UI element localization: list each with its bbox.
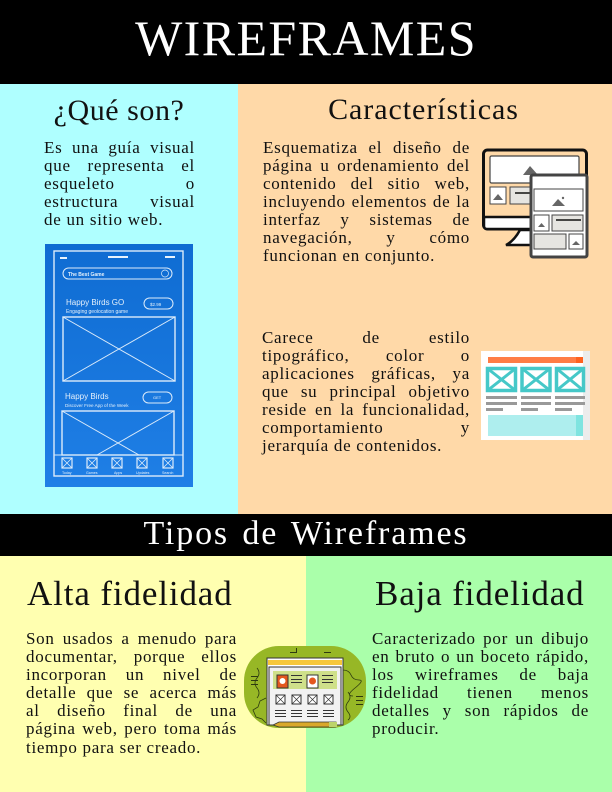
image: mobile wireframe blueprint [45,244,193,487]
text: características 2 [262,328,470,455]
panel: tipos band [0,514,612,556]
text: características 2: que su principal objetivo [262,382,470,401]
image: mobile wireframe blueprint: Games [86,471,98,475]
text: características 1: página u ordenamiento del [263,156,470,175]
panel: baja fidelidad [306,556,612,792]
text: qué son: de un sitio web. [44,210,163,229]
text: alta fidelidad: detalle que se acerca más [26,683,237,702]
text: alta fidelidad: incorporan un nivel de [26,665,237,684]
text: qué son: que representa el [44,156,195,175]
image: mobile wireframe blueprint: Happy Birds [65,392,109,401]
text: características 1 [263,138,470,265]
text: qué son: Es una guía visual [44,138,195,157]
text: alta fidelidad: página web, pero toma más [26,719,237,738]
text: alta fidelidad [26,629,237,757]
panel: características [238,84,612,514]
text: alta fidelidad: documentar, porque ellos [26,647,237,666]
text: características 1: contenido del sitio web, [263,174,470,193]
heading: baja fidelidad: Baja fidelidad [375,574,584,613]
image: mobile wireframe blueprint: Happy Birds GO [66,298,124,307]
text: características 1: incluyendo elementos de la [263,192,470,211]
text: características 2: tipográfico, color o [262,346,470,365]
icon: desktop and mobile wireframes [482,148,588,258]
image: mobile wireframe blueprint: Discover Free App of the Week [65,403,129,408]
text: alta fidelidad: tiempo para ser creado. [26,738,201,757]
image: mobile wireframe blueprint: Updates [136,471,150,475]
image: mobile wireframe blueprint: Engaging geolocation game [66,309,128,315]
panel: alta fidelidad [0,556,306,792]
text: baja fidelidad: producir. [372,719,439,738]
image: mobile wireframe blueprint: GET [153,395,162,400]
panel: qué son [0,84,238,514]
text: características 2: jerarquía de contenidos. [262,436,442,455]
text: qué son: esqueleto o [44,174,195,193]
image: mobile wireframe blueprint: Search [162,471,173,475]
heading: características: Características [328,93,519,126]
text: características 1: Esquematiza el diseño de [263,138,470,156]
text: características 1: interfaz y sistemas de [263,210,470,229]
text: características 2: Carece de estilo [262,328,470,346]
panel: title band [0,0,612,84]
icon: wireframe browser illustration [244,646,366,728]
image: mobile wireframe blueprint: The Best Game [68,272,105,278]
text: baja fidelidad: Caracterizado por un dibujo [372,629,589,648]
image: mobile wireframe blueprint: $2.99 [150,302,162,307]
heading: alta fidelidad: Alta fidelidad [27,574,233,613]
text: baja fidelidad: en bruto o un boceto rápido, [372,647,589,666]
image: mobile wireframe blueprint: Today [62,471,72,475]
text: características 1: funcionan en conjunto. [263,246,435,265]
text: qué son [44,138,195,229]
text: baja fidelidad: detalles y son rápidos de [372,701,589,720]
heading: qué son: ¿Qué son? [54,94,184,127]
text: qué son: estructura visual [44,192,195,211]
text: baja fidelidad: los wireframes de baja [372,665,589,684]
text: características 2: comportamiento y [262,418,470,437]
heading: tipos de wireframes: Tipos de Wireframes [144,515,468,552]
text: alta fidelidad: al diseño final de una [26,701,237,720]
text: características 2: aplicaciones gráficas, ya [262,364,470,383]
text: alta fidelidad: Son usados a menudo para [26,629,237,648]
text: características 1: navegación, y cómo [263,228,470,247]
icon: web page layout [481,351,590,440]
text: baja fidelidad: fidelidad tienen menos [372,683,589,702]
image: mobile wireframe blueprint: Apps [114,471,122,475]
text: características 2: reside en la funcionalidad, [262,400,470,419]
title: WIREFRAMES [135,10,477,66]
text: baja fidelidad [372,629,589,738]
